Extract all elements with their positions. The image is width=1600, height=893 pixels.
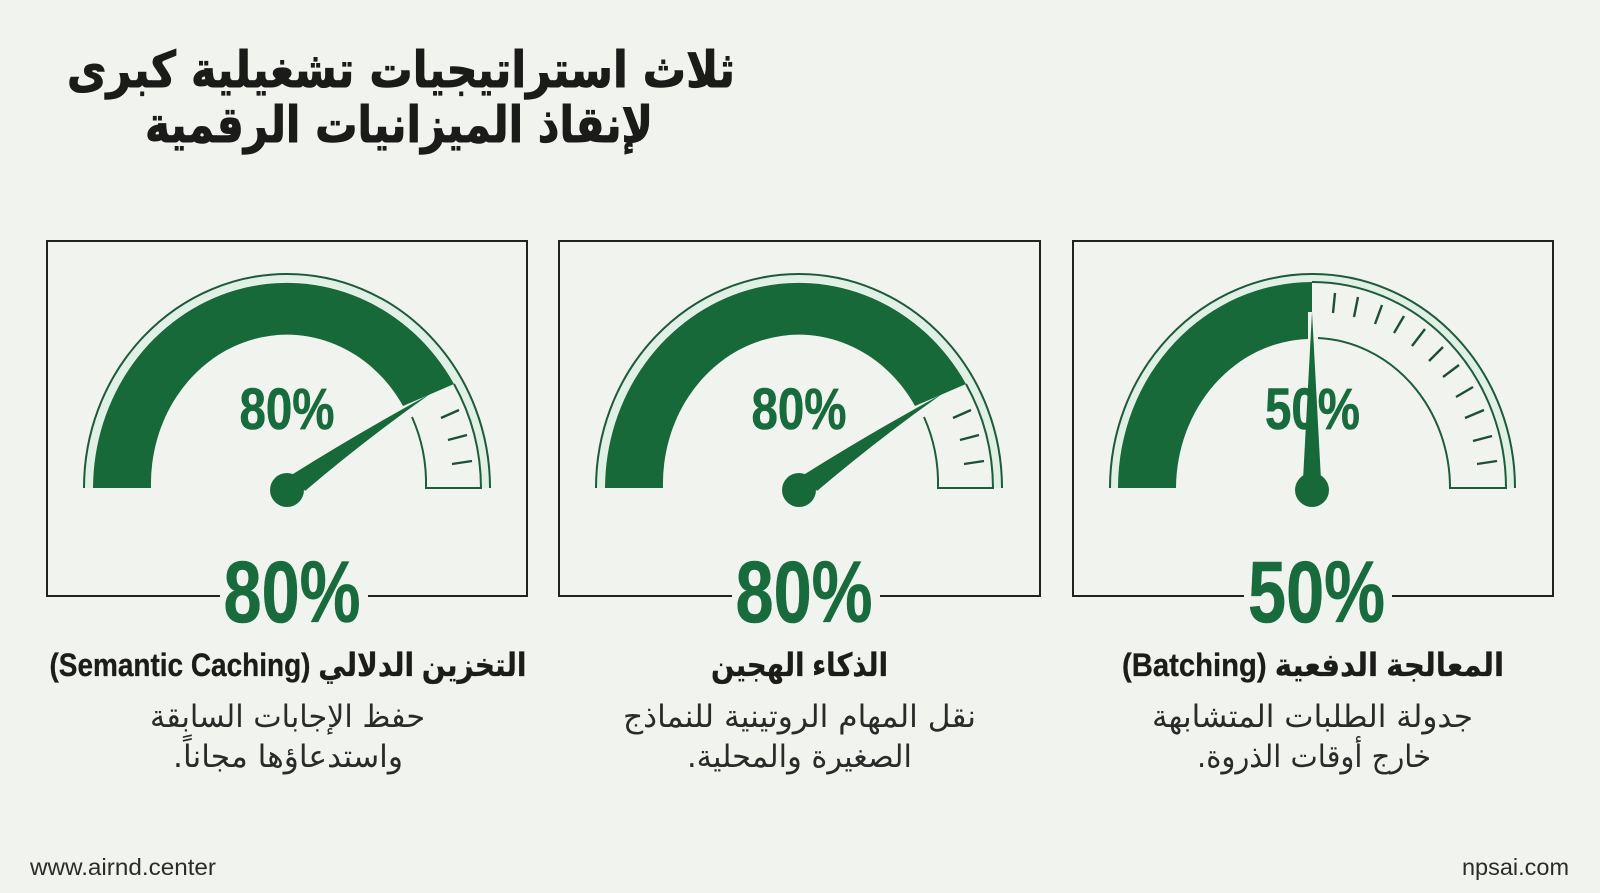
footer: right url: npsai.com: [1462, 854, 1569, 880]
description: واستدعاؤها مجاناً.: [173, 734, 403, 775]
description: [150, 699, 425, 775]
panel frame: [1073, 241, 1553, 596]
description: [623, 699, 976, 775]
title: ثلاث استراتيجيات تشغيلية كبرى: [67, 41, 735, 100]
description: [1152, 699, 1473, 775]
description: حفظ الإجابات السابقة: [150, 699, 425, 735]
gauge: 50 percent: 50%: [1265, 377, 1360, 442]
title: لإنقاذ الميزانيات الرقمية: [145, 96, 653, 155]
gauge: 80 percent: [596, 274, 1002, 507]
panel: batching: [1073, 241, 1553, 775]
heading: الذكاء الهجين: [711, 647, 888, 684]
footer: left url: www.airnd.center: [29, 854, 216, 880]
gauge: 50 percent: [1110, 274, 1515, 507]
gauge: 80 percent: 80%: [240, 377, 334, 442]
title: [67, 41, 735, 155]
heading: التخزين الدلالي (Semantic Caching): [50, 647, 526, 684]
panel: hybrid AI: [559, 241, 1040, 775]
panel: semantic caching: [47, 241, 527, 775]
gauge: 80 percent: [84, 274, 490, 507]
big value: 80%: [736, 544, 872, 641]
big value: 50%: [1248, 544, 1385, 641]
panel frame: [47, 241, 527, 596]
description: خارج أوقات الذروة.: [1197, 736, 1431, 775]
description: الصغيرة والمحلية.: [687, 739, 912, 775]
gauge: 80 percent: 80%: [752, 377, 846, 442]
description: جدولة الطلبات المتشابهة: [1152, 699, 1473, 735]
heading: المعالجة الدفعية (Batching): [1122, 647, 1504, 683]
description: نقل المهام الروتينية للنماذج: [623, 699, 976, 735]
big value: 80%: [224, 544, 360, 641]
panel frame: [559, 241, 1040, 596]
